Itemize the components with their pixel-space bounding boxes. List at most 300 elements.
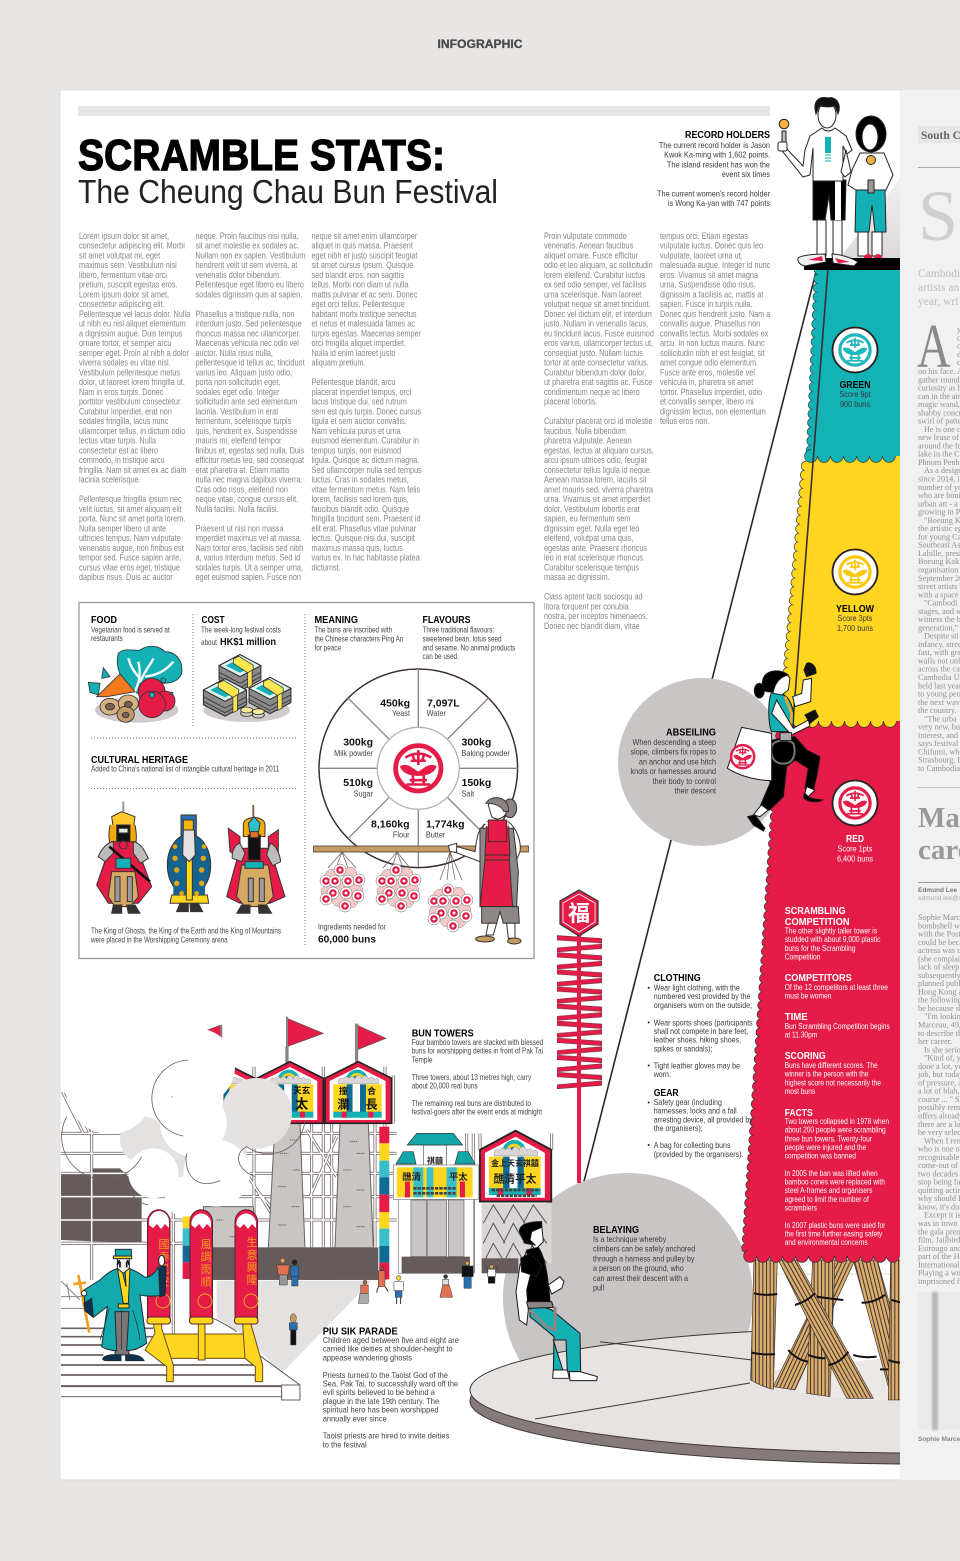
text: clothing and gear: harnesses, locks and a fall [654, 1106, 737, 1116]
text: time: TIME [785, 1011, 808, 1023]
body text column 3: Pellentesque blandit, arcu [312, 378, 395, 387]
pole with hanging buns [314, 846, 528, 932]
text: abseiling: their body to control [653, 776, 716, 786]
text: clothing and gear: leather shoes, hiking shoes, [654, 1035, 741, 1045]
body text column 5: tempus orci. Etiam egestas [660, 231, 748, 241]
caption: three kings [90, 926, 281, 945]
body text column 1: consectetur est ac libero [79, 446, 159, 456]
body text column 3: lacus tristique dui, sed rutrum [312, 397, 407, 407]
text: bun towers: about 20,000 real buns [412, 1081, 478, 1091]
body text column 4: massa ac dignissim. [544, 573, 610, 582]
body text column 2: nulla nec magna dapibus viverra. [196, 475, 303, 485]
text: ingredients needed [318, 922, 386, 946]
badge: green: GREEN [840, 379, 870, 391]
text: food [91, 614, 170, 643]
bun tower: yellow section [783, 445, 900, 727]
text: cultural heritage: Added to China's national list of intangible cultural heritage in 2011 [91, 764, 279, 774]
body text column 1: Curabitur imperdiet, erat non [79, 407, 172, 417]
sugar [343, 777, 373, 799]
illustration: record holders [778, 98, 900, 266]
title: The Cheung Chau Bun Festival [78, 173, 498, 210]
body text column 4: sapien, eu fermentum sem [544, 514, 631, 524]
body text column 1: consectetur adipiscing elit. [79, 300, 165, 309]
text: belaying: through a harness and pulley by [593, 1254, 694, 1264]
body text column 1: commodo, in tristique arcu [79, 456, 165, 465]
body text column 4: volutpat neque sit amet tincidunt. [544, 300, 651, 309]
text: facts: In 2005 the ban was lifted when [785, 1168, 878, 1178]
neighbouring page, blurred: Is she serio [924, 1045, 960, 1054]
text: cultural heritage [91, 754, 279, 774]
body text column 2: Phasellus a tristique nulla, non [196, 309, 294, 319]
text: cost: HK$1 million [220, 636, 276, 648]
body text column 2: mauris mi, eleifend tempor [196, 436, 282, 446]
body text column 4: Aenean massa lorem, iaculis sit [544, 475, 647, 485]
body text column 1: lacinia scelerisque. [79, 475, 141, 485]
body text column 1: Nam in eros turpis. Donec [79, 387, 163, 397]
text: ingredients needed: Ingredients needed for [318, 922, 386, 932]
body text column 5: tortor. Phasellus imperdiet, odio [660, 387, 763, 397]
badge: green: Score 9pt [839, 389, 871, 399]
salt: Salt [462, 789, 475, 799]
butter: Butter [426, 830, 446, 840]
body text column 3: aliquet in quis massa. Praesent [312, 241, 414, 251]
abseil and belay ropes [555, 268, 817, 1295]
body text column 2: neque. Proin faucibus nisi nulla, [196, 231, 299, 241]
text: bun towers: buns for worshipping deities in front of Pak Tai [412, 1046, 543, 1056]
body text column 2: Praesent ut nisi non massa [196, 524, 284, 534]
text: clothing and gear: the organisers); [654, 1123, 703, 1133]
flour: Flour [393, 830, 410, 840]
text: scoring: most buns [785, 1086, 815, 1096]
text: scoring: SCORING [785, 1050, 826, 1062]
illustration: red lantern pillars: 隆 [246, 1272, 258, 1288]
body text column 5: amet congue odio elementum. [660, 358, 758, 368]
text: piu sik parade: spiritual hero has been worshipped [323, 1405, 439, 1415]
newspaper page sheet [60, 90, 901, 1480]
neighbouring page, blurred: year, wri [918, 296, 958, 308]
body text column 1: venenatis augue, non finibus est [79, 543, 184, 553]
text: bun towers: Three towers, about 13 metres high, carry [412, 1072, 531, 1082]
body text column 1: Vestibulum pellentesque metus [79, 368, 180, 378]
text: clothing and gear: worn. [653, 1069, 671, 1079]
body text column 4: odio et leo aliquam, ac sollicitudin [544, 261, 653, 270]
text: flavours: Three traditional flavours: [422, 625, 494, 635]
text: scrambling competition [785, 905, 881, 962]
text: clothing and gear: (provided by the organisers). [654, 1149, 743, 1159]
dark background buildings [60, 1168, 142, 1243]
text: scoring [784, 1050, 881, 1096]
badge: red [832, 780, 878, 864]
illustration: steps and ground [60, 1280, 372, 1400]
circle: abseiling [618, 678, 786, 846]
text: belaying: climbers can be safely anchored [593, 1244, 695, 1254]
body text column 4: tortor at ante consectetur varius. [544, 358, 649, 368]
neighbouring page, blurred: Sophie Marce [918, 1436, 960, 1443]
text: time: at 11.30pm [785, 1030, 817, 1040]
body text column 4: ex sed odio semper, vel facilisis [544, 280, 646, 290]
text: time [785, 1011, 890, 1040]
illustration: red lantern pillars: 意 [246, 1246, 258, 1262]
text: piu sik parade: Children aged between five and eight are [323, 1336, 459, 1345]
neighbouring page, blurred: "The urba [924, 714, 957, 723]
text: piu sik parade: appease wandering ghosts [323, 1353, 412, 1363]
body text column 1: lectus vitae turpis. Nulla [79, 436, 157, 446]
body text column 2: sit amet molestie ex sodales ac. [196, 241, 299, 251]
body text column 2: interdum justo. Sed pellentesque [196, 319, 302, 329]
text: bun towers [412, 1028, 543, 1117]
text: bun towers: festival-goers after the event ends at midnight [412, 1107, 543, 1117]
body text column 3: neque sit amet enim ullamcorper [312, 231, 418, 241]
text: piu sik parade: Sea, Pak Tai, to successfully ward off the [323, 1379, 459, 1389]
body text column 3: ligula et sem auctor convallis. [312, 417, 407, 426]
sugar: 510kg [343, 777, 373, 789]
body text column 4: Donec vel dictum elit, et interdum [544, 309, 652, 319]
body text column 2: varius leo. Aliquam justo odio, [196, 368, 292, 378]
body text column 4: dignissim eget. Nulla eget leo [544, 524, 640, 534]
body text column 2: quis, hendrerit ex. Suspendisse [196, 426, 298, 436]
tower legs [751, 1258, 901, 1400]
neighbouring page, blurred: S [918, 176, 958, 256]
illustration: taoist priest [73, 1249, 166, 1361]
body text column 1: fringilla. Nam sit amet ex ac diam [79, 465, 187, 475]
body text column 3: eget nibh et justo suscipit feugiat [312, 251, 418, 261]
illustration: yellow stand [145, 1323, 263, 1382]
body text column 4: ut pharetra erat sagittis ac. Fusce [544, 378, 653, 387]
body text column 3: Nam vehicula purus et urna [312, 426, 401, 436]
text: food: Vegetarian food is served at [91, 625, 170, 635]
text: scrambling competition: SCRAMBLING [785, 905, 846, 917]
text: belaying [593, 1224, 695, 1293]
second rope [793, 268, 828, 722]
badge: yellow: 1,700 buns [837, 623, 873, 633]
text: flavours: and sesame. No animal products [422, 642, 516, 653]
text: abseiling [631, 726, 717, 796]
body text column 4: litora torquent per conubia [544, 602, 629, 612]
body text column 2: pellentesque id tellus ac, tincidunt [196, 358, 305, 368]
body text column 2: sodales eget odio. Integer [196, 387, 280, 397]
circle: belaying [503, 1173, 753, 1423]
text: scoring: highest score not necessarily the [785, 1077, 881, 1088]
text: cost: about [201, 637, 218, 647]
colour pillar [379, 1127, 389, 1279]
body text column 4: Class aptent taciti sociosqu ad [544, 592, 643, 602]
text: facts: scramblers [785, 1203, 817, 1213]
body text column 1: sit amet volutpat mi, eget [79, 251, 161, 261]
body text column 4: Curabitur placerat orci id molestie [544, 417, 653, 426]
body text column 5: dignissim a facilisis ac, mattis at [660, 290, 764, 300]
body text column 1: viverra sodales eu vitae nisl. [79, 358, 171, 368]
text: clothing and gear [648, 972, 753, 1159]
body text column 4: nostra, per inceptos himenaeos. [544, 612, 648, 621]
body text column 2: porta non sollicitudin eget, [196, 378, 280, 387]
text: meaning: The buns are inscribed with [314, 625, 392, 635]
text: food: restaurants [91, 633, 123, 643]
text: piu sik parade: annually ever since [323, 1414, 387, 1423]
text: food: FOOD [91, 614, 117, 626]
body text column 5: urna. Suspendisse odio risus, [660, 280, 756, 290]
man's trophy [778, 119, 789, 151]
body text column 2 [196, 231, 306, 582]
text: cost [201, 614, 281, 648]
section label: infographic: INFOGRAPHIC [438, 37, 523, 51]
body text column 4: pharetra vulputate. Aenean [544, 436, 632, 446]
neighbouring page, blurred: the country. [918, 706, 957, 715]
body text column 4: faucibus. Nulla bibendum [544, 426, 626, 436]
chart: ingredients wheel [319, 669, 518, 868]
body text column 3: lectus. Quisque nisi dui, suscipit [312, 534, 416, 543]
neighbouring page, blurred: gather round [918, 375, 960, 384]
badge: red: 6,400 buns [837, 854, 873, 864]
text: bun towers: Four bamboo towers are stacked with blessed [412, 1037, 543, 1047]
body text column 4: eros varius, ullamcorper lectus ut, [544, 339, 653, 348]
text: clothing and gear: GEAR [654, 1087, 679, 1099]
text: facts: steel A-frames and organisers [785, 1185, 873, 1195]
salt [462, 777, 491, 799]
body text column 3: eget orci tellus. Pellentesque [312, 300, 405, 309]
salt: 150kg [462, 777, 491, 789]
far right sign board and frame [480, 1131, 552, 1273]
bun tower: red section [746, 710, 900, 1256]
body text column 4: consequat justo. Nullam luctus [544, 348, 643, 358]
gate with roofs [393, 1133, 478, 1273]
neighbouring page, blurred: International [918, 1260, 960, 1269]
text: facts: In 2007 plastic buns were used for [785, 1220, 886, 1230]
milk powder: Milk powder [334, 748, 373, 758]
body text column 1: Pellentesque fringilla ipsum nec [79, 495, 182, 504]
butter: 1,774kg [426, 819, 465, 831]
neighbouring page, blurred [901, 90, 960, 1480]
body text column 3: fringilla tincidunt sem. Praesent id [312, 514, 421, 524]
neighbouring page, blurred: He is one c [924, 425, 960, 434]
title: SCRAMBLE STATS: [78, 131, 445, 180]
illustration: red lantern pillars: 生 [246, 1234, 258, 1250]
illustration: red lantern pillars: 調 [200, 1248, 212, 1264]
illustration: belayer [516, 1222, 597, 1381]
body text column 3: vitae fermentum metus. Nam felis [312, 485, 420, 495]
body text column 2: venenatis dolor bibendum. [196, 270, 281, 280]
caption: three kings: were placed in the Worshipping Ceremony arena [90, 935, 228, 945]
body text column 2: neque vitae, congue cursus elit. [196, 495, 298, 504]
body text column 3: varius ex. In hac habitasse platea [312, 553, 420, 563]
text: abseiling: knots or harnesses around [631, 767, 716, 776]
body text column 3: ligula. Quisque ac dictum magna. [312, 456, 419, 465]
badge: yellow: YELLOW [836, 603, 874, 615]
text: flavours [422, 614, 516, 661]
body text column 4: lorem eleifend. Curabitur luctus [544, 270, 645, 280]
text: abseiling: When descending a steep [633, 737, 717, 747]
dark tower base [213, 1247, 378, 1280]
platform [470, 1331, 900, 1464]
sign boards: 天玄 [293, 1084, 311, 1096]
illustration: climber [727, 663, 823, 831]
text: cultural heritage: CULTURAL HERITAGE [91, 754, 188, 766]
sugar: Sugar [354, 789, 373, 799]
body text column 1: consectetur adipiscing elit. Morbi [79, 241, 185, 251]
text: piu sik parade: Priests turned to the Taoist God of the [323, 1370, 448, 1380]
body text column 3: Sed ullamcorper nulla sed tempus [312, 465, 422, 475]
body text column 3: sed blandit eros, non sagittis [312, 270, 404, 280]
body text column 5: et convallis semper, libero mi [660, 397, 754, 407]
body text column 4 [543, 231, 654, 631]
water: Water [427, 708, 446, 718]
illustration: red lantern pillars [147, 1210, 258, 1324]
platform on top of tower [804, 258, 900, 270]
body text column 4: Donec nec blandit diam, vitae [544, 621, 640, 631]
neighbouring page, blurred: A [917, 312, 951, 381]
body text column 3: placerat imperdiet tempus, orci [312, 387, 411, 397]
body text column 4: eleifend, volutpat urna quis, [544, 534, 633, 543]
illustration: festival towers scene [40, 1017, 552, 1345]
neighbouring page, blurred: her career. [918, 1037, 952, 1046]
body text column 2: erat pharetra at. Etiam mattis [196, 465, 290, 475]
milk powder [334, 737, 373, 758]
body text column 2: sodales turpis. Ut a semper urna, [196, 563, 303, 573]
body text column 4: egestas, lectus at aliquam cursus, [544, 446, 654, 456]
body text column 5: sollicitudin nibh et est feugiat, sit [660, 348, 765, 358]
body text column 1 [79, 231, 191, 582]
body text column 3: maximus massa quis, luctus [312, 543, 403, 553]
body text column 1: dolor, ut laoreet lorem fringilla ut. [79, 378, 185, 387]
text: scrambling competition: The other slightly taller tower is [785, 926, 877, 936]
badge: green: 900 buns [840, 399, 870, 409]
neighbouring page, blurred: "I'm lookin [924, 1012, 960, 1021]
neighbouring page, blurred: to Cambodia [918, 764, 960, 773]
neighbouring page, blurred: When I ren [924, 1136, 960, 1145]
body text column 1: sodales fringilla, lacus nunc [79, 417, 168, 426]
text: competitors: Of the 12 competitors at least three [785, 982, 888, 992]
illustration: the three kings [97, 802, 285, 913]
sign boards [223, 1060, 392, 1124]
baking powder [462, 737, 510, 758]
icon: vegetables [88, 646, 182, 723]
text: scrambling competition: buns for the Scrambling [785, 943, 855, 953]
text: clothing and gear: A bag for collecting buns [654, 1141, 731, 1150]
body text column 4: justo. Nullam in venenatis lacus, [543, 319, 648, 329]
text: abseiling: an anchor and use hitch [639, 757, 716, 767]
body text column 2: efficitur metus leo, sed consequat [196, 456, 305, 465]
illustration: red lantern pillars: 雨 [200, 1261, 212, 1277]
text: abseiling: slope, climbers fix ropes to [631, 747, 717, 757]
text: cost: COST [202, 614, 225, 626]
body text column 2: Nullam non ex sapien. Vestibulum [196, 251, 306, 261]
text: facts: people were injured and the [785, 1142, 866, 1152]
body text column 2: Pellentesque eget libero eu libero [196, 280, 304, 290]
text: facts: three bun towers. Twenty-four [785, 1133, 872, 1144]
text: scrambling competition: Competition [785, 952, 820, 962]
body text column 4: eu tincidunt lacus. Fusce euismod [544, 329, 654, 339]
body text column 1: porta. Nunc sit amet porta lorem. [79, 514, 185, 524]
text: piu sik parade: PIU SIK PARADE [323, 1326, 398, 1338]
body text column 1: velit luctus, sit amet aliquam elit [79, 504, 182, 514]
body text column 3: dictumst. [312, 563, 341, 573]
body text column 4: Proin vulputate commodo [544, 231, 627, 241]
text: meaning: the Chinese characters Ping An [314, 633, 403, 644]
text: facts: FACTS [785, 1107, 813, 1119]
text: facts [785, 1107, 889, 1247]
body text column 3: aliquam pretium. [312, 358, 365, 368]
clouds of smoke [61, 1030, 306, 1217]
text: record holders: The current record holder is Jason [659, 140, 770, 150]
body text column 5: eros. Vivamus sit amet magna [660, 270, 758, 280]
body text column 3: Nulla id enim laoreet justo [312, 348, 396, 358]
body text column 3: elit erat. Phasellus vitae pulvinar [312, 524, 416, 534]
illustration: red lantern pillars: 順 [200, 1274, 212, 1290]
grey towers [203, 1123, 373, 1248]
body text column 1: pretium, suscipit egestas eros. [79, 280, 178, 290]
text: competitors: COMPETITORS [785, 972, 852, 984]
body text column 5: vulputate luctus. Donec quis leo [660, 241, 763, 251]
text: record holders: RECORD HOLDERS [685, 129, 770, 141]
text: record holders: is Wong Ka-yan with 747 points [668, 199, 770, 208]
neighbouring page, blurred: Edmund Lee [918, 887, 957, 894]
text: piu sik parade: evil spirits believed to be behind a [323, 1388, 435, 1397]
panel: bun facts box [79, 602, 534, 958]
text: flavours: sweetened bean, lotus seed [422, 633, 502, 644]
body text column 3: faucibus blandit odio. Quisque [312, 504, 410, 514]
body text column 2: fermentum, scelerisque turpis [196, 417, 291, 426]
king of ghosts [97, 802, 152, 913]
yeast: Yeast [392, 708, 411, 718]
sign boards: 合 [367, 1085, 376, 1097]
body text column 4: placerat lobortis. [544, 397, 598, 407]
neighbouring page, blurred: "Cambodi [924, 599, 958, 608]
body text column 1: ultricies tempus. Nam vulputate [79, 534, 181, 543]
text: competitors [785, 972, 888, 1001]
gate with roofs: 醮清 [402, 1169, 422, 1183]
body text column 4: Curabitur scelerisque tempus [544, 563, 639, 573]
sign boards: 長 [366, 1095, 378, 1112]
text: facts: bamboo cones were replaced with [785, 1177, 885, 1187]
bun tower: green section [811, 268, 900, 456]
text: flavours: FLAVOURS [422, 614, 470, 626]
body text column 5: tellus eros non. [660, 417, 709, 426]
body text column 1: Lorem ipsum dolor sit amet, [79, 290, 169, 300]
text: abseiling: their descent [675, 786, 717, 796]
body text column 3: et netus et malesuada fames ac [312, 319, 415, 329]
body text column 2: finibus et, egestas sed nulla. Duis [196, 446, 304, 456]
text: scoring: Buns have different scores. The [785, 1060, 878, 1070]
sign boards: 撞 [339, 1085, 348, 1097]
water: 7,097L [427, 698, 460, 710]
text: bun towers: Temple [412, 1054, 432, 1065]
body text column 1: a dignissim augue. Duis tempus [79, 329, 182, 339]
text: record holders: event six times [722, 170, 770, 179]
body text column 4: condimentum neque ac libero [544, 387, 640, 397]
left colour pillar [182, 1216, 192, 1279]
body text column 5: Donec quis hendrerit justo. Nam a [660, 309, 771, 319]
water [427, 698, 460, 718]
text: facts: competition was banned [785, 1151, 856, 1161]
neighbouring page, blurred: planned publ [918, 979, 960, 988]
neighbouring page, blurred: "Kind of, y [924, 1054, 960, 1063]
body text column 1: maximus sem. Vestibulum nisi [79, 261, 177, 270]
body text column 1: ornare tortor, et semper arcu [79, 339, 171, 348]
text: record holders [657, 129, 771, 208]
caption: three kings: The King of Ghosts, the King of the Earth and the King of Mountains [91, 926, 281, 936]
body text column 2: lacinia. Vestibulum in erat [196, 407, 279, 417]
gate with roofs: 平太 [449, 1169, 468, 1183]
gate with roofs: 祺囍 [427, 1155, 443, 1166]
king of mountains [227, 805, 285, 913]
body text column 3: orci fringilla aliquet imperdiet. [312, 339, 406, 348]
text: scrambling competition: studded with about 9,000 plastic [785, 934, 881, 944]
neighbouring page, blurred: Despite sti [924, 632, 960, 641]
body text column 2: rhoncus massa nec ullamcorper. [196, 329, 301, 339]
body text column 4: Curabitur bibendum dolor dolor, [544, 368, 646, 378]
badge: red: RED [846, 833, 864, 845]
illustration: red lantern pillars: 風 [200, 1236, 212, 1252]
body text column 3: habitant morbi tristique senectus [312, 309, 417, 319]
